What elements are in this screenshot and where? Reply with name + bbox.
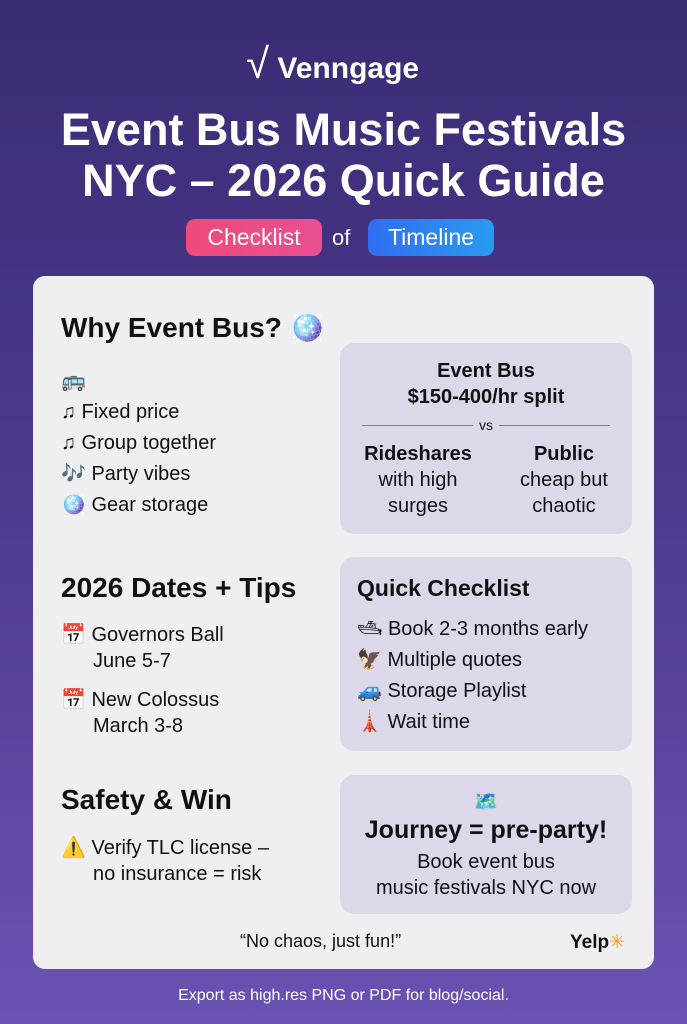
quote: “No chaos, just fun!” [240,931,401,951]
panel: comparison [340,343,632,534]
benefits list: 🎶 Party vibes [61,463,190,485]
panel: comparison: chaotic [532,495,596,517]
footer: Export as high.res PNG or PDF for blog/social. [178,987,509,1004]
panel: quick checklist: 🚙 Storage Playlist [357,680,526,702]
panel: call to action: Book event bus [417,851,555,873]
benefits list: ♫ Group together [61,432,216,454]
dates list: 📅 Governors Ball [61,624,224,646]
benefits list [61,370,216,516]
dates list: March 3-8 [93,715,183,737]
pill: timeline [368,219,494,256]
panel: comparison: vs [479,417,493,433]
panel: call to action: Journey = pre-party! [365,816,607,844]
panel: call to action: music festivals NYC now [376,877,596,899]
panel: comparison: with high [379,469,457,491]
title [61,104,626,206]
panel: quick checklist [340,557,632,751]
panel: comparison: $150-400/hr split [408,386,564,408]
panel: comparison: cheap but [520,469,608,491]
pill: checklist: Checklist [207,224,301,250]
panel: comparison: Public [534,443,594,465]
panel: quick checklist: 🗼 Wait time [357,711,470,733]
card [33,276,654,969]
heading: dates: 2026 Dates + Tips [61,572,296,603]
dates list: June 5-7 [93,650,171,672]
heading: why event bus: Why Event Bus? 🪩 [61,312,325,343]
benefits list: ♫ Fixed price [61,401,179,423]
panel: comparison: Event Bus [437,360,535,382]
pill: checklist [186,219,322,256]
of: of [332,225,350,250]
benefits list: 🚌 [61,370,86,392]
dates list [61,623,224,737]
panel: comparison: Rideshares [364,443,472,465]
safety warning [61,836,269,885]
safety warning: no insurance = risk [93,863,261,885]
dates list: 📅 New Colossus [61,689,219,711]
yelp logo: Yelp✳ [570,932,625,953]
panel: quick checklist: 🛥 Book 2-3 months early [357,618,588,640]
title: NYC – 2026 Quick Guide [82,155,605,206]
heading: safety: Safety & Win [61,784,232,815]
benefits list: 🪩 Gear storage [61,494,208,516]
panel: quick checklist: Quick Checklist [357,575,530,601]
pill: timeline: Timeline [388,224,474,250]
title: Event Bus Music Festivals [61,104,626,155]
safety warning: ⚠️ Verify TLC license – [61,837,269,859]
panel: call to action [340,775,632,914]
panel: call to action: 🗺️ [474,791,498,813]
panel: quick checklist: 🦅 Multiple quotes [357,649,522,671]
panel: comparison: surges [388,495,448,517]
logo: √ Venngage [246,40,419,87]
